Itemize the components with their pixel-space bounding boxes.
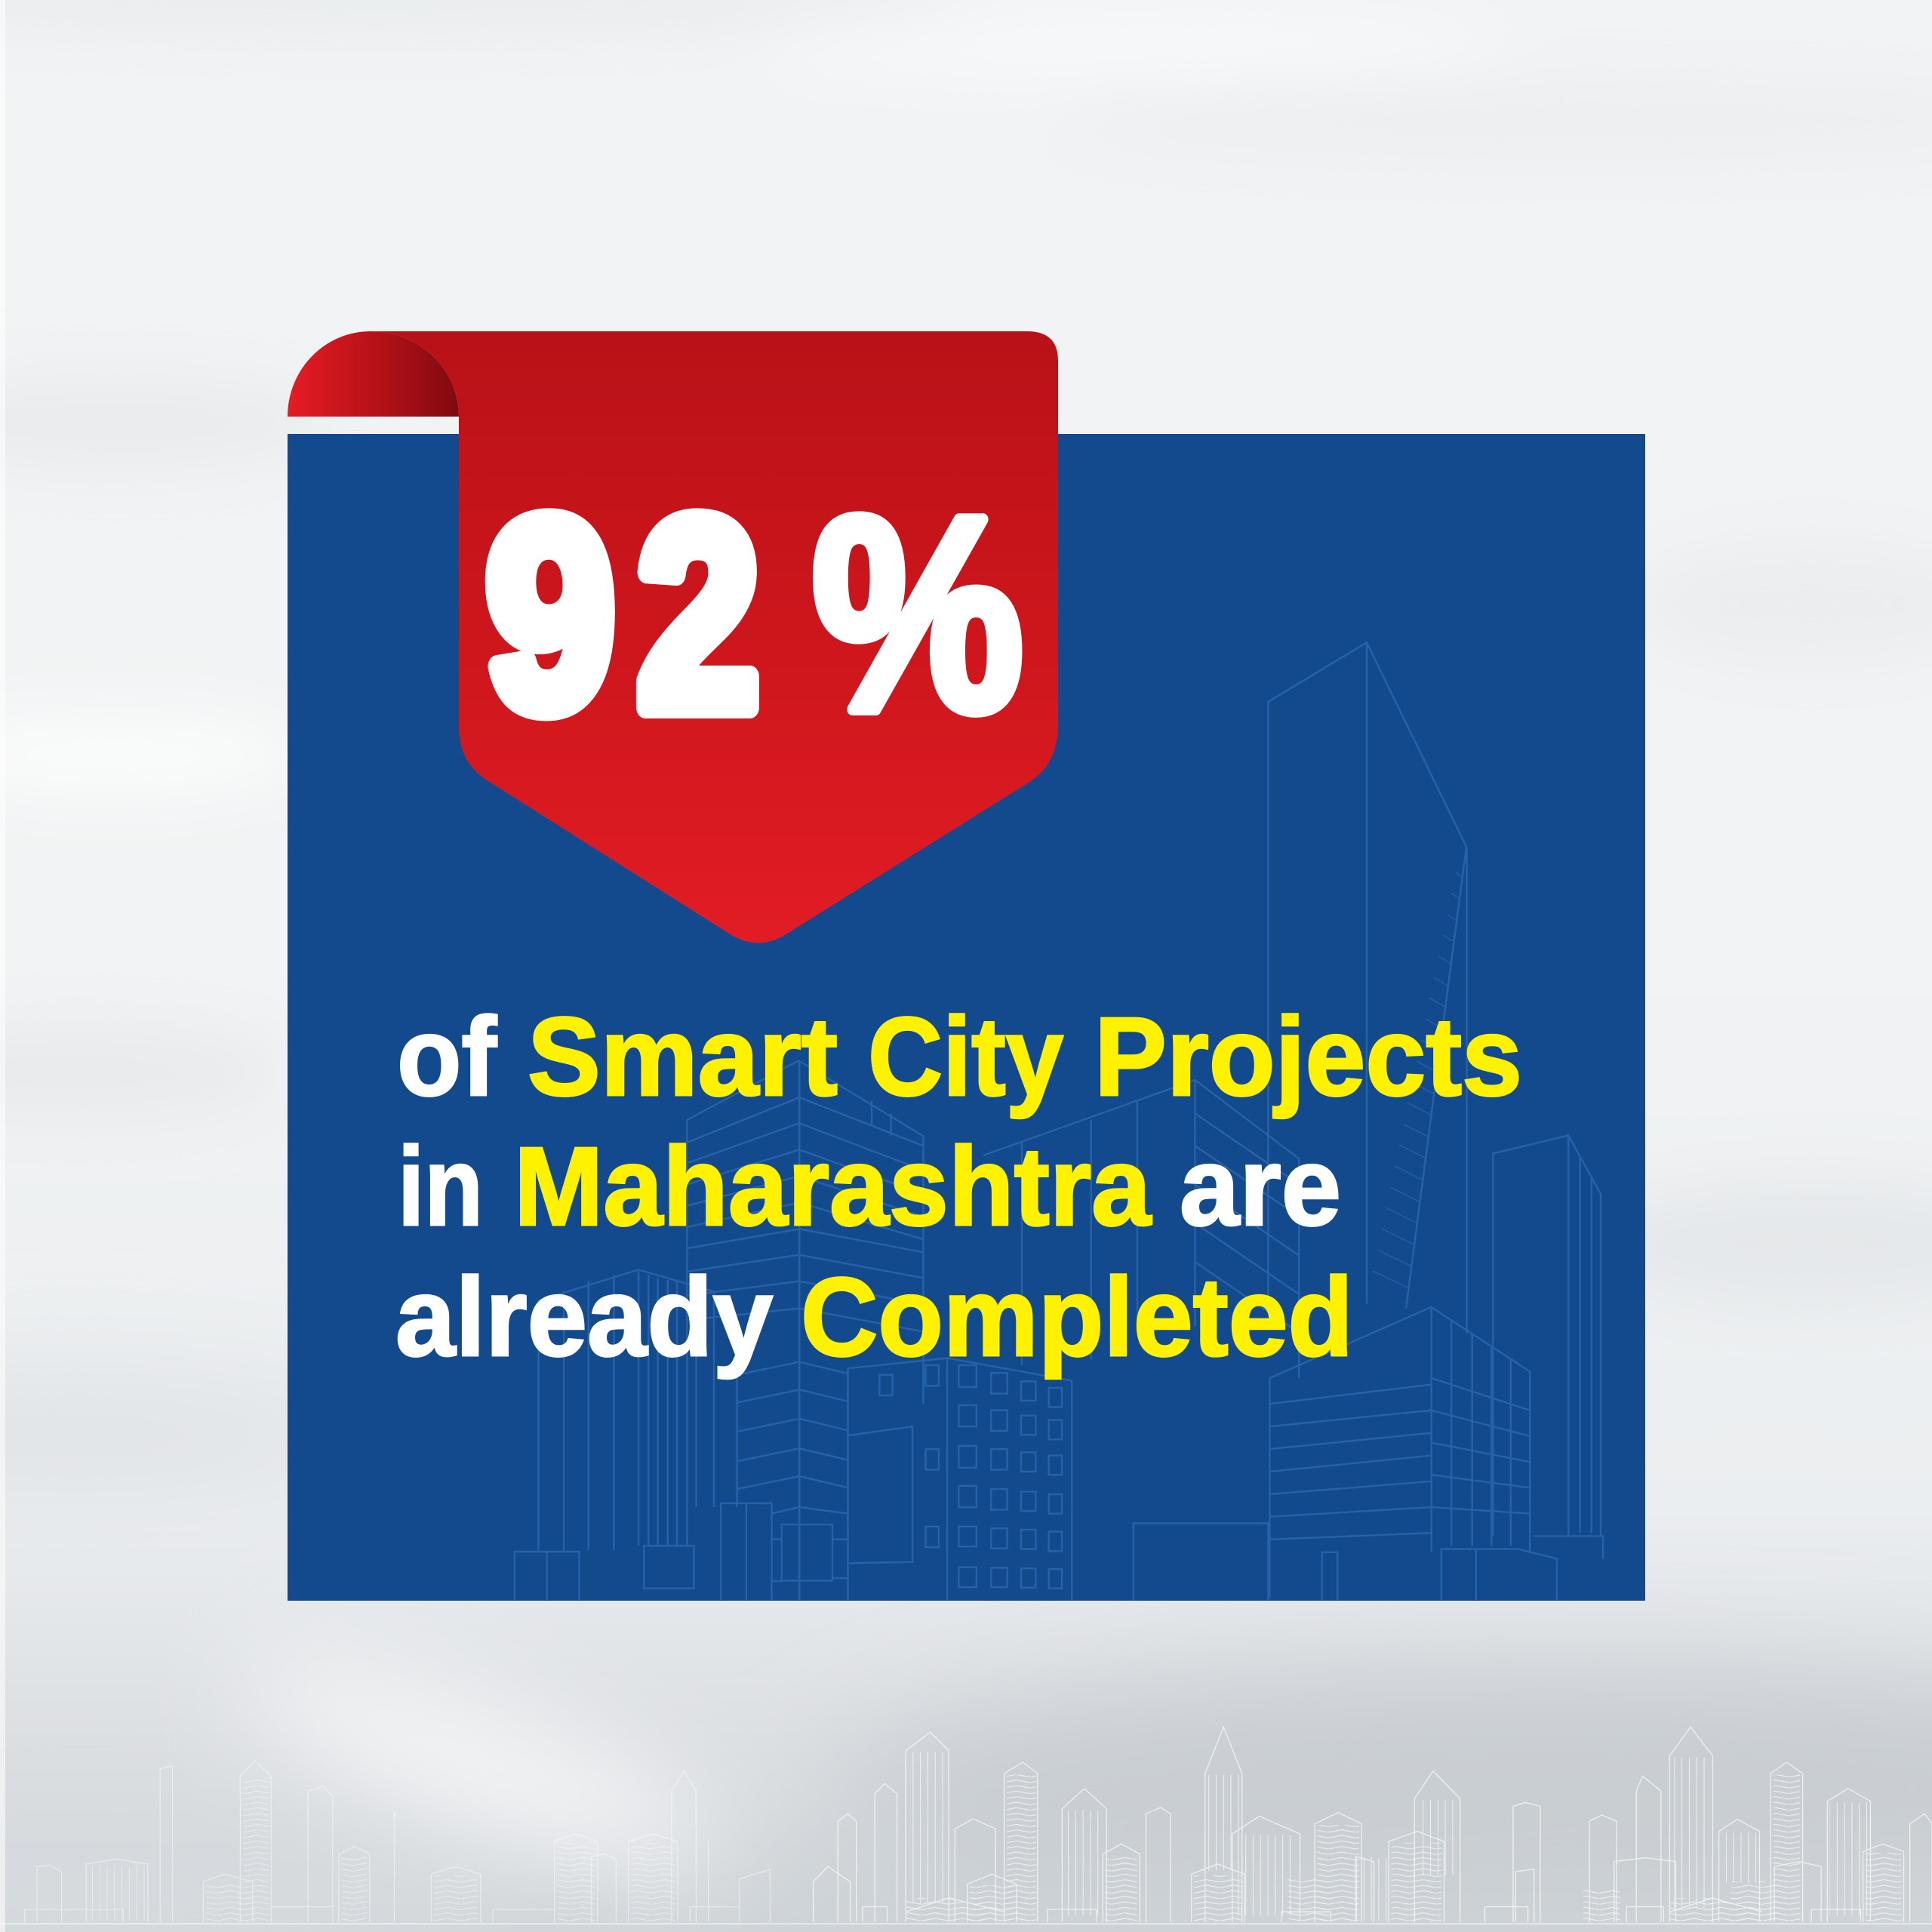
line 2: Maharashtra [514,1124,1152,1249]
tower glass hatching [1373,847,1466,1309]
stat: 92%: 9 [487,465,614,765]
line 1 [397,995,1522,1119]
line 1: City [868,995,1063,1119]
line 2: in [398,1124,483,1249]
panel: blue card [288,434,1645,1601]
line 2: are [1180,1124,1341,1249]
headline text [395,995,1522,1380]
line 1: Smart [528,995,838,1119]
line 1: Projects [1094,995,1522,1119]
line 1: of [397,995,497,1119]
ribbon fold curl [288,331,459,417]
line 3 [395,1255,1353,1380]
bottom skyline outline [0,1727,1932,1924]
stat: 92% [487,460,1023,768]
stat: 92%: 2 [638,464,758,764]
line 3: already [395,1255,773,1380]
panel building line art [515,642,1603,1600]
ribbon: red banner [371,331,1058,943]
line 3: Completed [801,1255,1353,1380]
stat: 92%: % [812,460,1023,768]
